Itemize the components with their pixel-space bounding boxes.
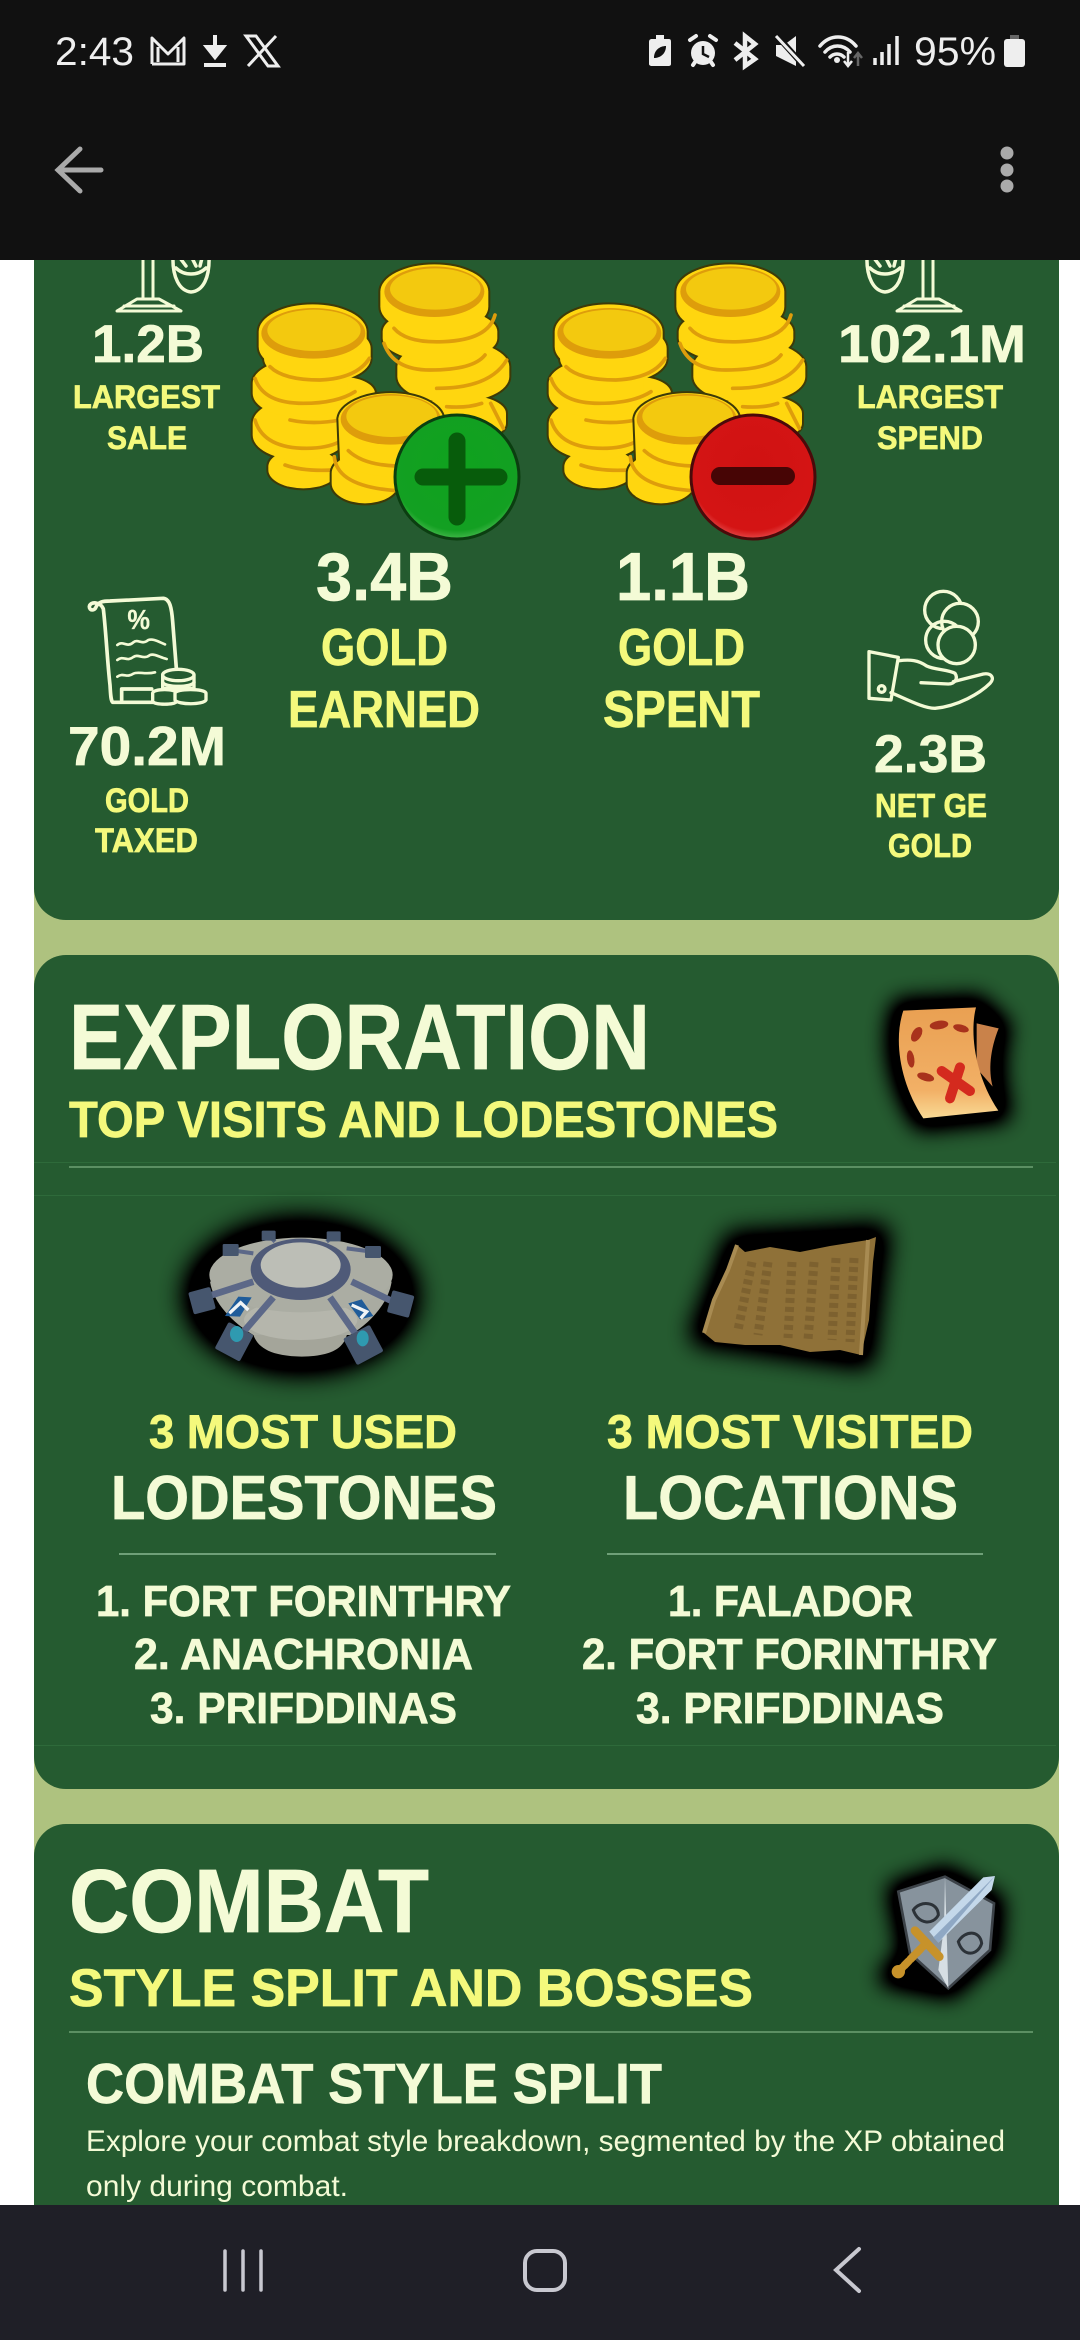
icon: back [836,2249,859,2291]
icon: recents [225,2251,261,2290]
stat: gold earned [288,539,480,739]
stat: net GE gold: GOLD [888,827,972,864]
stat: net GE gold: NET GE [875,787,987,824]
bottom navigation bar [0,2205,1080,2340]
heading: combat style split: COMBAT STYLE SPLIT [86,2052,662,2116]
stat: gold spent: 1.1B [616,539,750,615]
text: combat style description: only during combat. [86,2170,348,2203]
status: battery percent: 95% [914,30,996,74]
column: most visited locations: 3 MOST VISITED [607,1405,973,1458]
column: most used lodestones: 2. ANACHRONIA [134,1630,473,1679]
icon: mail [152,38,184,64]
icon: X logo [246,36,278,66]
stat: gold taxed [68,715,226,860]
stat: net GE gold: 2.3B [874,725,987,784]
icon: download [204,35,226,65]
stat: gold taxed: GOLD [105,782,189,820]
heading: exploration: EXPLORATION [69,985,650,1089]
text: combat style description: Explore your combat style breakdown, segmented by the XP obtained [86,2125,1005,2158]
icon: back arrow [58,149,101,191]
column: most visited locations: LOCATIONS [623,1464,958,1533]
stat: largest sale: 1.2B [92,315,204,374]
icon: plus badge [395,415,519,539]
icon: tax receipt: % [127,604,150,635]
icon: treasure map [899,1007,999,1118]
panel: grand exchange gold stats [34,150,1059,920]
divider: exploration heading [69,1166,1033,1168]
status: time: 2:43 [55,30,134,74]
divider: combat heading [69,2031,1033,2033]
icon: lodestone [184,1218,418,1374]
column: most used lodestones [96,1405,511,1733]
icon: alarm [690,36,716,65]
column: most visited locations [582,1405,997,1733]
column: most visited locations: 1. FALADOR [668,1577,913,1626]
icon: minus badge [691,415,815,539]
stat: largest spend [838,315,1026,456]
stat: largest sale [73,315,220,456]
icon: coins with plus [253,264,509,503]
icon: wifi [820,37,862,66]
column: most used lodestones: LODESTONES [111,1464,497,1533]
stat: largest spend: SPEND [877,420,983,456]
icon: shield and sword [890,1876,995,1988]
icon: overflow menu [1000,146,1014,192]
icon: parchment map [704,1237,876,1355]
stat: largest spend: LARGEST [857,379,1003,415]
icon: battery [1004,35,1025,67]
subheading: top visits and lodestones: TOP VISITS AND LODESTONES [69,1091,778,1148]
subheading: style split and bosses: STYLE SPLIT AND BOSSES [69,1959,753,2018]
stat: gold taxed: 70.2M [68,715,226,777]
heading: combat: COMBAT [69,1852,429,1952]
stat: gold spent: GOLD [618,619,745,677]
icon: right balance scale [867,250,961,311]
text: combat style description [86,2125,1005,2203]
stat: gold spent: SPENT [603,681,760,739]
column: most used lodestones: 3 MOST USED [149,1405,457,1458]
stat: largest sale: LARGEST [73,379,220,415]
icon: battery saver [649,35,671,66]
stat: gold earned: EARNED [288,681,480,739]
column: most visited locations: 3. PRIFDDINAS [636,1684,944,1733]
column: most used lodestones: 1. FORT FORINTHRY [96,1577,511,1626]
stat: gold taxed: TAXED [95,822,198,860]
panel: combat [34,1824,1059,2324]
icon: left balance scale [117,250,209,311]
icon: mute [776,36,804,66]
panel: exploration [34,955,1059,1789]
stat: largest spend: 102.1M [838,315,1026,374]
icon: home [525,2251,565,2290]
icon: tax receipt [89,598,206,704]
icon: signal [875,36,897,65]
top system bar [0,0,1080,260]
icon: bluetooth [735,36,755,66]
stat: gold spent [603,539,760,739]
column: most visited locations: 2. FORT FORINTHRY [582,1630,997,1679]
icon: coins with minus [549,264,805,503]
icon: hand with coins [869,591,992,708]
stat: gold earned: 3.4B [316,539,453,615]
stat: net GE gold [874,725,987,864]
stat: gold earned: GOLD [321,619,448,677]
stat: largest sale: SALE [107,420,187,456]
column: most used lodestones: 3. PRIFDDINAS [150,1684,457,1733]
